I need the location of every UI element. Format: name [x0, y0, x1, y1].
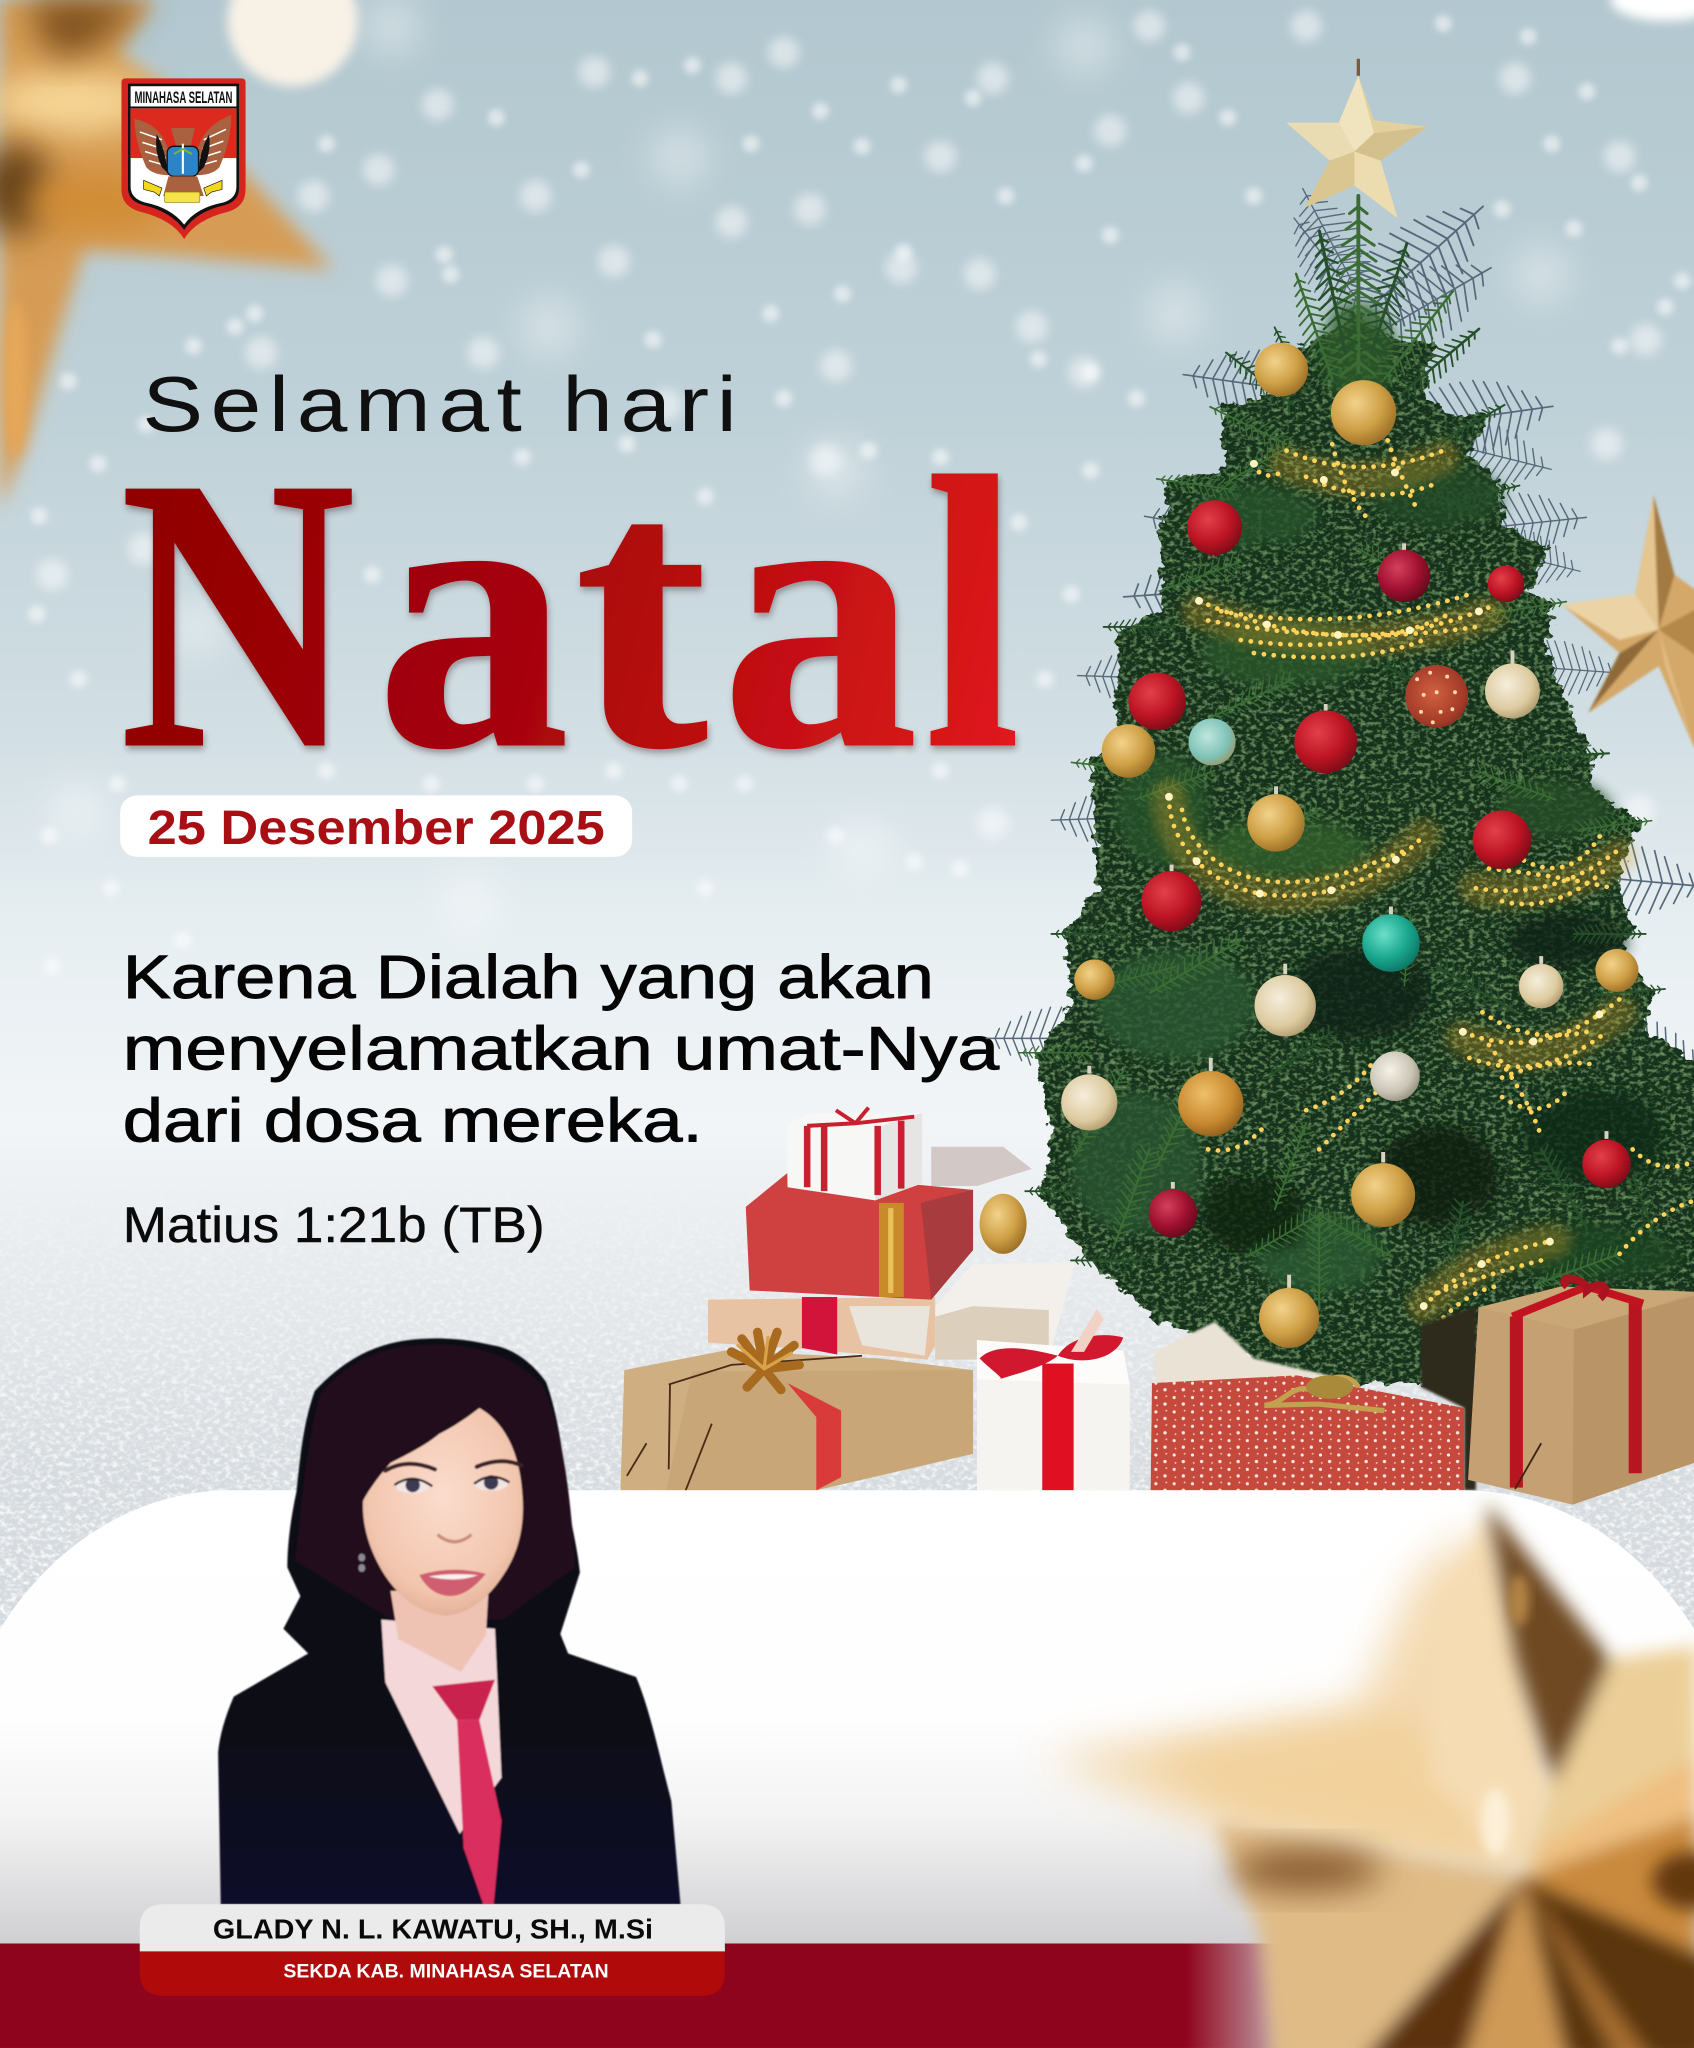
- portrait: neck: [391, 1591, 488, 1672]
- tree base backdrop: [1155, 1306, 1476, 1490]
- portrait: brows: [385, 1461, 521, 1471]
- logo: Minahasa Selatan shield: [121, 78, 246, 239]
- portrait: earring: [359, 1557, 364, 1575]
- gift: large kraft box: [620, 1351, 973, 1490]
- portrait: shirt: [381, 1620, 502, 1834]
- gift: foil box: [708, 1297, 935, 1360]
- gift: white box with red ribbon: [977, 1309, 1130, 1490]
- name card: lower red band: [140, 1946, 725, 1996]
- tree: frosted outer branches: [986, 175, 1694, 1106]
- heading: Natal: a: [721, 398, 918, 829]
- decorative gold star right edge: [1562, 495, 1694, 747]
- portrait: nose: [438, 1535, 471, 1542]
- portrait: hair and jacket silhouette: [218, 1338, 680, 1904]
- background: falling snow bokeh: [37, 24, 1682, 967]
- tree: foliage shading: [1071, 300, 1678, 1293]
- decorative blurred star top left: [0, 0, 333, 509]
- decorative glowing light top: [227, 0, 358, 86]
- verse text: Karena Dialah yang akan: [123, 943, 934, 1012]
- portrait: face: [363, 1408, 523, 1616]
- gift: red box with gold ribbon: [746, 1173, 973, 1300]
- name: GLADY N. L. KAWATU, SH., M.Si: [213, 1913, 653, 1944]
- tree: red baubles: [1128, 500, 1631, 1238]
- decorative blurred star bottom right: [1045, 1502, 1694, 2048]
- logo text: MINAHASA SELATAN: [135, 89, 232, 107]
- verse text: menyelamatkan umat-Nya: [123, 1015, 1000, 1084]
- tree: cream, teal and silver baubles: [1061, 543, 1606, 1288]
- role: SEKDA KAB. MINAHASA SELATAN: [283, 1961, 609, 1982]
- heading: Natal: t: [575, 398, 712, 829]
- gift: right kraft box: [1468, 1278, 1694, 1505]
- portrait: hair tint: [295, 1345, 575, 1620]
- portrait: lips: [419, 1570, 486, 1596]
- heading: Natal: [120, 398, 1020, 829]
- gift: white striped box: [786, 1108, 922, 1200]
- christmas tree: [980, 59, 1694, 1384]
- tree: glitter bauble: [1405, 665, 1468, 728]
- name card: upper light band: [140, 1904, 725, 1951]
- scripture reference: Matius 1:21b (TB): [123, 1197, 545, 1253]
- tree: gold baubles: [980, 343, 1638, 1348]
- gift: white box behind: [935, 1262, 1075, 1360]
- tree: needle boughs: [1019, 196, 1669, 1306]
- gifts pile: [620, 1108, 1476, 1490]
- portrait: eyes: [394, 1475, 509, 1494]
- gift: gold pine cone bow: [731, 1332, 799, 1390]
- gift: red dotted box: [1151, 1375, 1464, 1490]
- heading: Natal: N: [120, 398, 355, 829]
- name card: [140, 1904, 725, 1996]
- date pill: 25 Desember 2025: [148, 801, 605, 855]
- tree: garlands of lights: [1169, 431, 1691, 1332]
- tree: foliage body: [1038, 313, 1694, 1384]
- heading: Selamat hari: Selamat hari: [142, 360, 744, 448]
- tree topper: gold star: [1286, 59, 1428, 218]
- bottom red band: [0, 1943, 1694, 2048]
- background: snow ground texture: [0, 1286, 1694, 1628]
- heading: Natal: a: [376, 398, 569, 829]
- portrait: tie: [432, 1680, 502, 1904]
- panel: white rounded base: [0, 1490, 1694, 2048]
- decorative glowing light top right: [1610, 0, 1694, 21]
- portrait: woman in black suit: [218, 1338, 680, 1904]
- verse text: [123, 943, 1000, 1156]
- logo emblem: eagle: [135, 115, 231, 202]
- gift: gray box behind: [931, 1147, 1032, 1186]
- verse text: dari dosa mereka.: [123, 1087, 703, 1156]
- heading: Natal: l: [925, 398, 1020, 829]
